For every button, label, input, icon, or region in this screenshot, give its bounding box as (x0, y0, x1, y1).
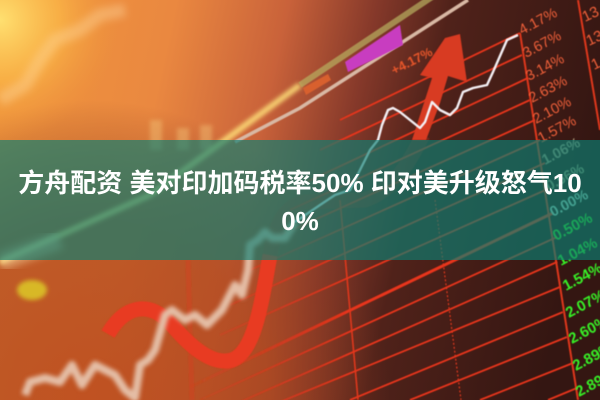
green percentage axis labels: 1.04% (555, 235, 600, 270)
red percentage axis labels: 2.10% (530, 94, 574, 128)
yellow spot (17, 280, 47, 300)
green percentage axis labels (550, 210, 600, 400)
blurred pale trend line top-left (0, 10, 125, 100)
red percentage axis labels: 2.63% (526, 73, 570, 107)
title (18, 168, 582, 236)
grid lines (190, 33, 577, 400)
teal title band (0, 140, 600, 260)
red rising arrow (108, 34, 467, 361)
white price line, blurred part (25, 222, 295, 398)
red percentage axis labels: 3.14% (523, 51, 567, 85)
far right red column labels (580, 3, 600, 74)
red percentage axis labels: 1.57% (535, 113, 579, 147)
title: 0% (281, 206, 319, 236)
title: 方舟配资 美对印加码税率50% 印对美升级怒气10 (18, 168, 582, 198)
red percentage axis labels: 3.67% (520, 28, 564, 62)
vertical axis lines (188, 0, 600, 400)
candle ticker band (0, 0, 468, 262)
fading grey-green axis labels: 0.00% (547, 187, 591, 221)
red percentage axis labels (516, 5, 579, 147)
blurred bars (150, 120, 212, 150)
fading grey-green axis labels (539, 135, 591, 221)
white price line, sharp part (295, 35, 518, 222)
fading grey-green axis labels: 0.56% (543, 161, 587, 195)
green percentage axis labels: 0.50% (550, 210, 595, 245)
red percentage axis labels: 4.17% (516, 5, 560, 39)
fading grey-green axis labels: 1.06% (539, 135, 583, 169)
gain callout: +4.17% (389, 44, 435, 78)
